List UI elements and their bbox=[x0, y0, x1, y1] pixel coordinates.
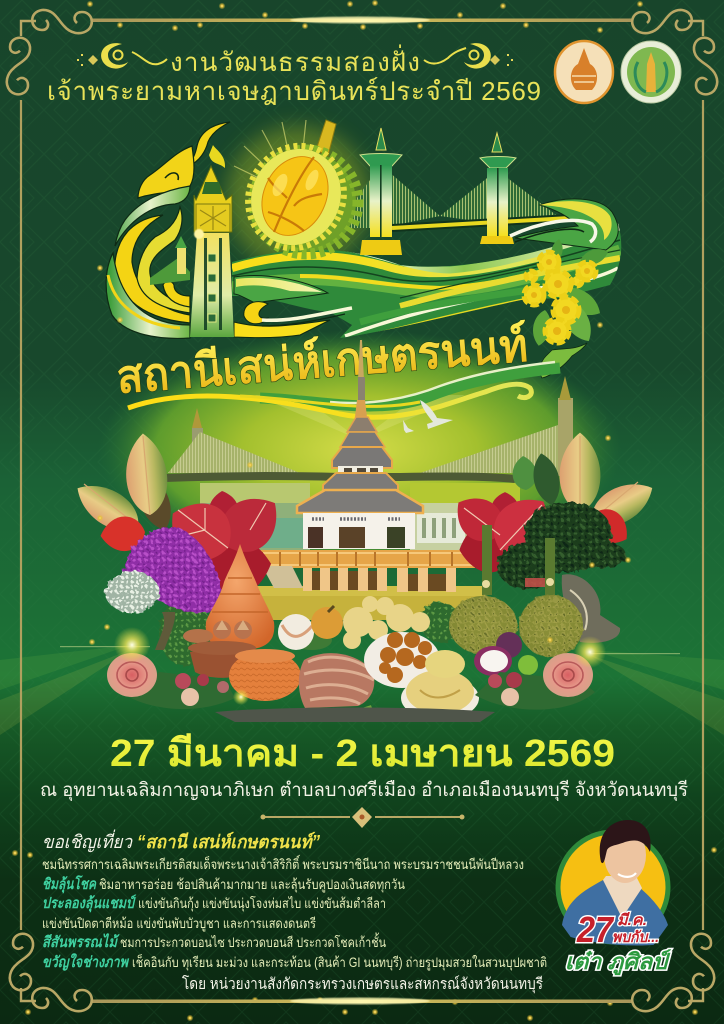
land and water behind temple bbox=[200, 483, 520, 620]
seagulls bbox=[403, 400, 453, 433]
left flame ornament bbox=[106, 122, 230, 338]
invitation heading bbox=[42, 829, 320, 853]
date badge bbox=[576, 909, 659, 950]
river waves bbox=[232, 226, 622, 342]
bridge pylon right bbox=[480, 133, 516, 244]
activity: contests bbox=[42, 894, 386, 913]
left red leaves bbox=[158, 484, 291, 600]
activity: contests: ประลองลุ้นแชมป์ bbox=[42, 894, 137, 913]
yellow circle bbox=[558, 832, 668, 942]
mangosteen bbox=[474, 632, 538, 676]
small pagoda behind tower bbox=[150, 236, 190, 285]
activity: contests: แข่งขันกินกุ้ง แข่งขันนุ่งโจงห่มสไบ แข่งขันส้มตำลีลา bbox=[138, 895, 386, 912]
guest performer badge bbox=[558, 820, 671, 976]
activity: food and shopping: ชิมอาหารอร่อย ช้อปสินค้ามากมาย และลุ้นรับคูปองเงินสดทุกวัน bbox=[99, 877, 405, 893]
plate of sweets bbox=[364, 632, 440, 688]
bridge left pylon bbox=[192, 408, 203, 476]
activity: plants: ชมการประกวดบอนไซ ประกวดบอนสี ประกวดโชคเก้าชั้น bbox=[120, 932, 386, 950]
venue line: ณ อุทยานเฉลิมกาญจนาภิเษก ตำบลบางศรีเมือง อำเภอเมืองนนทบุรี จังหวัดนนทบุรี bbox=[40, 779, 688, 802]
date badge: มี.ค. bbox=[617, 912, 647, 929]
sky glow behind temple bbox=[98, 330, 622, 570]
seal: agriculture office bbox=[555, 41, 613, 103]
activity: plants: สีสันพรรณไม้ bbox=[42, 933, 120, 951]
activity: food and shopping: ชิมลุ้นโชค bbox=[42, 874, 97, 894]
bridge deck bbox=[165, 476, 515, 479]
clock tower bbox=[190, 145, 234, 337]
header swirl left bbox=[78, 43, 167, 69]
bush behind trunk bbox=[159, 598, 211, 666]
lower flame at right bbox=[540, 343, 587, 378]
lower title ribbon bbox=[128, 362, 560, 417]
grilled river prawns bbox=[294, 653, 374, 715]
event date: 27 มีนาคม - 2 เมษายน 2569 bbox=[110, 733, 615, 775]
date badge: 27 bbox=[576, 909, 615, 950]
orange pavilion bbox=[250, 340, 475, 592]
divider with diamond bbox=[260, 807, 464, 828]
activity: photography bbox=[42, 953, 547, 971]
header line two: เจ้าพระยามหาเจษฎาบดินทร์ประจำปี 2569 bbox=[47, 76, 541, 106]
right roses and foliage bbox=[475, 653, 595, 710]
activity: food and shopping bbox=[42, 874, 405, 894]
basket of sweets bbox=[183, 620, 256, 678]
slate ground bbox=[215, 708, 495, 722]
durian glow and rays bbox=[226, 120, 370, 270]
activity: photography: ขวัญใจช่างภาพ bbox=[42, 953, 130, 971]
river waves base bbox=[232, 223, 621, 338]
performer portrait bbox=[562, 820, 668, 950]
invitation heading: ขอเชิญเที่ยว bbox=[42, 829, 133, 853]
bridge deck bbox=[392, 218, 570, 228]
terracotta tower bbox=[206, 544, 274, 650]
activity: plants bbox=[42, 932, 386, 951]
bridge right pylon bbox=[558, 376, 573, 476]
right red leaves bbox=[446, 485, 562, 575]
right croton leaves bbox=[511, 433, 660, 553]
bridge cables bbox=[335, 165, 560, 228]
white hall at right bbox=[417, 513, 465, 543]
performer name: เต๋า ภูศิลป์ bbox=[565, 949, 671, 976]
bonsai tree bbox=[482, 502, 626, 643]
header line one: งานวัฒนธรรมสองฝั่ง bbox=[170, 44, 420, 77]
date badge: พบกับ... bbox=[612, 929, 659, 946]
header swirl right bbox=[424, 43, 512, 69]
inner curl wave bbox=[234, 275, 352, 338]
left croton leaves bbox=[68, 432, 178, 553]
activity: contests continued: แข่งขันปิดตาตีหม้อ แข่งขันพับบัวบูชา และการแสดงดนตรี bbox=[42, 916, 316, 932]
seal: provincial emblem bbox=[621, 41, 681, 103]
bridge pylon left bbox=[360, 128, 402, 255]
right curl ornament bbox=[510, 199, 618, 250]
bridge cables bbox=[168, 425, 558, 473]
invitation heading: “สถานี เสน่ห์เกษตรนนท์” bbox=[137, 831, 320, 852]
left roses and foliage bbox=[107, 653, 235, 709]
header title bbox=[47, 43, 541, 106]
durians bbox=[449, 595, 583, 657]
main logo artwork bbox=[106, 120, 622, 417]
yellow flower cluster bbox=[524, 238, 610, 347]
exhibition line: ชมนิทรรศการเฉลิมพระเกียรติสมเด็จพระนางเจ้าสิริกิติ์ พระบรมราชินีนาถ พระบรมราชชนนีพันปีหลวง bbox=[42, 854, 524, 872]
activity: photography: เช็คอินกับ ทุเรียน มะม่วง และกระท้อน (สินค้า GI นนทบุรี) ถ่ายรูปมุมสวยในสวนบุปผชาติ bbox=[132, 953, 547, 971]
riverside scene bbox=[68, 340, 660, 722]
durian flesh bowl bbox=[401, 650, 479, 720]
organiser credit: โดย หน่วยงานสังกัดกระทรวงเกษตรและสหกรณ์จังหวัดนนทบุรี bbox=[182, 975, 543, 994]
fruits behind plate bbox=[278, 596, 460, 650]
carved terracotta bowl bbox=[229, 649, 301, 701]
logo title: สถานีเสน่ห์เกษตรนนท์ bbox=[115, 319, 530, 403]
invitation text block bbox=[42, 829, 547, 994]
scene sparkles bbox=[89, 265, 631, 705]
purple bougainvillea bbox=[105, 527, 222, 650]
durian fruit bbox=[231, 120, 372, 268]
